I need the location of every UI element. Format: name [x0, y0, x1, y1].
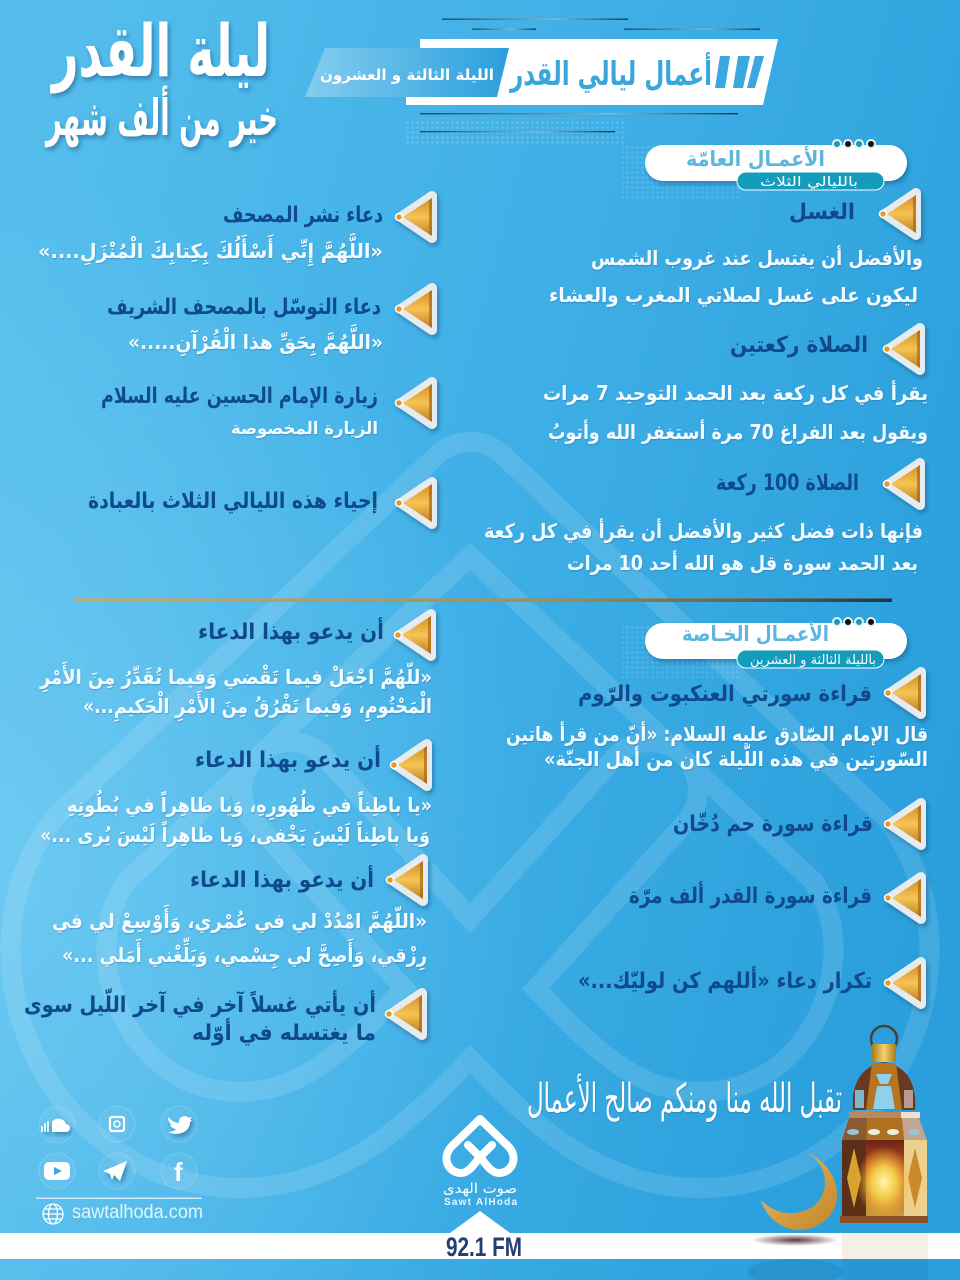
icon: bullet — [394, 614, 431, 656]
frequency: 92.1 FM — [446, 1232, 522, 1262]
item: dua three — [52, 859, 427, 970]
logo Arabic name: صوت الهدى — [443, 1181, 517, 1197]
heading: أن يأتي غسلاً آخر في آخر اللّيل سوى — [24, 988, 376, 1018]
decorative halftone — [405, 118, 625, 145]
icon: bullet — [386, 993, 422, 1035]
heading: دعاء نشر المصحف — [223, 203, 383, 228]
text: «اللّهُمَّ امْدُدْ لي في عُمْري، وَأَوْسِعْ لي في — [52, 904, 427, 934]
icon: bullet — [396, 196, 432, 238]
item: dua two — [40, 744, 432, 847]
watermark logo — [0, 420, 960, 1240]
item: keeping vigil — [88, 482, 432, 524]
item: mushaf opening dua — [38, 196, 432, 266]
logo Latin name: Sawt AlHoda — [444, 1197, 517, 1208]
icon: instagram — [99, 1106, 135, 1142]
section heading: special acts — [622, 618, 907, 678]
title calligraphy: ليلة القدر — [50, 9, 270, 94]
dots — [833, 618, 875, 626]
item: Surah Qadr — [629, 877, 921, 919]
reflection — [842, 1233, 928, 1259]
heading text: الأعمـال العامّة — [686, 145, 825, 171]
icon: bullet — [884, 962, 921, 1004]
item: ziyarah — [101, 382, 432, 439]
title calligraphy — [44, 9, 278, 148]
icon: bullet — [884, 463, 920, 505]
text: «اللَّهُمَّ بِحَقِّ هذا الْقُرْآنِ.....» — [128, 324, 383, 356]
icon: bullet — [396, 482, 432, 524]
heading: أن يدعو بهذا الدعاء — [198, 616, 384, 645]
base — [840, 1216, 928, 1223]
item: tawassul dua — [107, 288, 432, 356]
icon: bullet — [390, 744, 427, 786]
glow — [856, 1146, 912, 1218]
item: Ankabut and Rum — [506, 672, 928, 772]
sub pill — [737, 172, 884, 190]
lower body — [842, 1140, 866, 1216]
heading: أن يدعو بهذا الدعاء — [195, 744, 381, 773]
text: «للّهُمَّ اجْعَلْ فيما تَقْضي وَفيما تُقَدِّرُ مِنَ الأَمْرِ — [39, 661, 432, 692]
moon reflection — [747, 1259, 843, 1280]
text: بعد الحمد سورة قل هو الله أحد 10 مرات — [567, 549, 918, 575]
dots — [833, 140, 875, 148]
item: dua one — [39, 614, 432, 722]
icon: bullet — [396, 288, 432, 330]
stripes icon — [715, 56, 764, 88]
text: رِزْقي، وَأَصِحَّ لي جِسْمي، وَبَلِّغْني أَمَلي ...» — [62, 937, 427, 970]
icon: bullet — [884, 672, 921, 714]
heading text: الأعمـال الخـاصة — [682, 620, 829, 646]
icon: youtube — [39, 1153, 75, 1189]
main title: أعمال ليالي القدر — [509, 52, 712, 93]
icon: bullet — [396, 382, 432, 424]
heading: الصلاة ركعتين — [730, 333, 868, 358]
item: ghusl — [549, 193, 923, 308]
gold divider — [73, 598, 892, 602]
icon: facebook — [161, 1153, 197, 1189]
moon shadow — [751, 1234, 839, 1246]
item: two rakat prayer — [543, 328, 928, 444]
sub pill text: بالليلة الثالثة و العشرين — [750, 653, 876, 668]
logo — [443, 1119, 522, 1262]
item: hundred rakat prayer — [484, 463, 923, 575]
header banner — [305, 18, 778, 145]
heading: تكرار دعاء «أللهم كن لوليّك...» — [578, 965, 872, 994]
heading: أن يدعو بهذا الدعاء — [190, 864, 374, 893]
text: ويقول بعد الفراغ 70 مرة أستغفر الله وأتوبُ — [548, 418, 928, 444]
sub pill — [737, 650, 884, 668]
dome — [853, 1062, 915, 1110]
heading: زيارة الإمام الحسين عليه السلام — [101, 384, 378, 409]
heading: الغسل — [789, 200, 855, 225]
icon: bullet — [884, 877, 921, 919]
text: ليكون على غسل لصلاتي المغرب والعشاء — [549, 283, 918, 308]
heading: الصلاة 100 ركعة — [716, 471, 859, 496]
sub-title text: الليلة الثالثة و العشرون — [320, 66, 494, 84]
icon: bullet — [884, 328, 920, 370]
upper body — [842, 1118, 927, 1140]
blue sub-title tab — [305, 48, 509, 97]
footer white strip — [0, 1233, 960, 1259]
heading: ما يغتسله في أوّله — [192, 1017, 376, 1046]
lantern — [840, 1026, 928, 1280]
website url: sawtalhoda.com — [72, 1202, 203, 1223]
crescent moon — [747, 1153, 843, 1280]
text: الزيارة المخصوصة — [231, 419, 378, 439]
text: «اللَّهُمَّ إِنِّي أَسْأَلُكَ بِكِتابِكَ الْمُنْزَلِ....» — [38, 233, 383, 266]
white banner — [406, 39, 778, 105]
icon: bullet — [884, 803, 921, 845]
text: «يا باطِناً في ظُهُورِهِ، وَيا ظاهِراً في بُطُونِهِ — [67, 790, 432, 820]
logo mark — [446, 1119, 514, 1173]
text: يقرأ في كل ركعة بعد الحمد التوحيد 7 مرات — [543, 379, 928, 406]
icon: facebook: f — [174, 1157, 183, 1187]
item: repeat dua — [578, 962, 921, 1004]
heading: قراءة سورتي العنكبوت والرّوم — [578, 682, 872, 707]
social icons — [39, 1106, 197, 1189]
icon: globe — [43, 1204, 63, 1224]
heading: قراءة سورة حم دُخّان — [673, 812, 873, 837]
text: والأفضل أن يغتسل عند غروب الشمس — [591, 244, 923, 270]
house peak — [450, 1211, 510, 1233]
neck — [872, 1044, 896, 1062]
website row — [36, 1198, 203, 1224]
title calligraphy: خير من ألف شهر — [44, 85, 278, 148]
heading: قراءة سورة القدر ألف مرّة — [629, 880, 872, 909]
heading: إحياء هذه الليالي الثلاث بالعبادة — [88, 489, 378, 514]
text: وَيا باطِناً لَيْسَ يَخْفى، وَيا ظاهِراً لَيْسَ يُرى ...» — [40, 821, 430, 847]
sub pill text: بالليالي الثلاث — [760, 175, 858, 190]
item: second ghusl — [24, 988, 422, 1046]
heading: دعاء التوسّل بالمصحف الشريف — [107, 295, 381, 320]
item: Surah Dukhan — [673, 803, 921, 845]
ring — [871, 1026, 897, 1052]
icon: bullet — [386, 859, 423, 901]
icon: bullet — [880, 193, 916, 235]
icon: telegram — [99, 1153, 135, 1189]
band — [849, 1112, 901, 1118]
section heading: general acts — [622, 140, 907, 200]
icon: soundcloud — [39, 1107, 75, 1143]
icon: twitter — [161, 1106, 197, 1142]
text: الْمَحْتُومِ، وَفيما تَفْرُقُ مِنَ الأَمْرِ الْحَكيمِ...» — [83, 690, 432, 722]
